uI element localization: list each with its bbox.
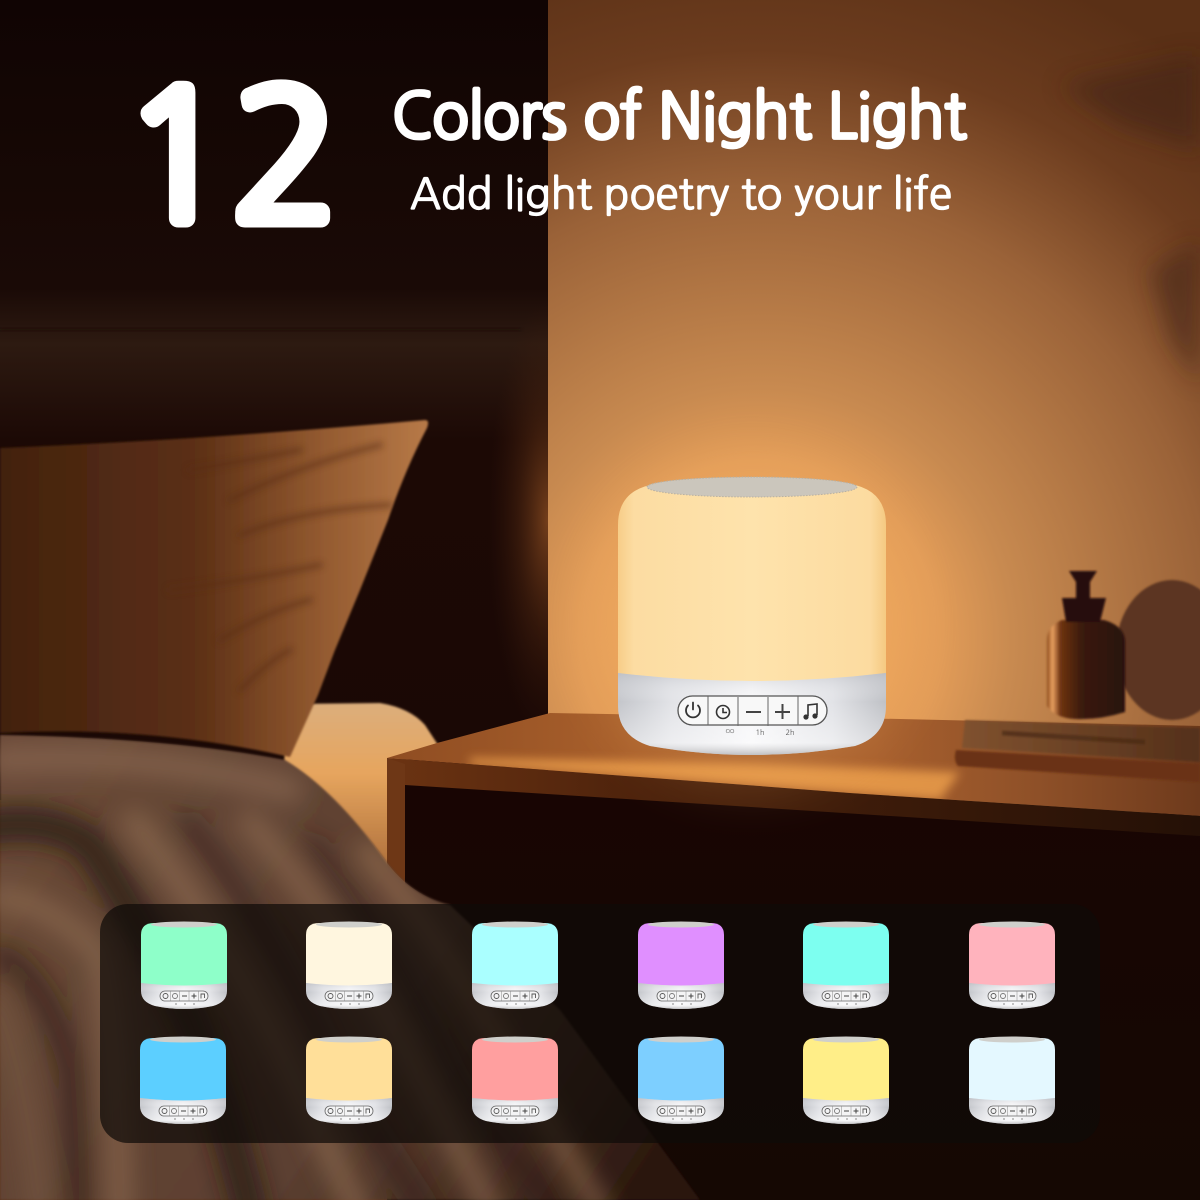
timer labels: 1h — [755, 729, 765, 737]
lamp swatch: light blue — [638, 1036, 724, 1124]
lamp swatch: cream — [306, 922, 392, 1009]
plant shadow on wall — [1060, 55, 1200, 385]
icon: minus — [746, 711, 761, 713]
lamp swatch: warm yellow — [306, 1036, 392, 1124]
round mirror object — [1116, 580, 1200, 720]
nightstand — [387, 713, 1200, 1200]
lamp swatch: green — [141, 922, 227, 1009]
headboard — [0, 0, 548, 800]
blanket folds — [0, 759, 600, 1200]
lamp shade — [618, 478, 886, 682]
lamp swatch: pink — [969, 922, 1055, 1009]
speaker grille — [647, 477, 857, 497]
table interior — [387, 780, 1200, 1200]
pillow wrinkles — [238, 440, 393, 686]
bed sheet — [280, 703, 440, 880]
title number: 12 — [122, 68, 340, 246]
panel background — [100, 904, 1100, 1143]
icon: music note — [804, 704, 817, 719]
lamp swatch: sky blue — [140, 1036, 226, 1124]
subheading: Add light poetry to your life — [410, 174, 952, 216]
lamp swatch: yellow — [803, 1036, 889, 1124]
control buttons — [678, 696, 827, 726]
bottle — [1047, 571, 1125, 719]
table top — [387, 713, 1200, 816]
icon: power — [686, 702, 700, 717]
timer labels: 2h — [785, 729, 795, 737]
panel: color swatches — [100, 904, 1100, 1143]
lamp swatch: purple — [638, 922, 724, 1009]
icon: plus — [775, 704, 790, 719]
lamp swatch: pale cyan — [472, 922, 558, 1009]
books — [955, 720, 1200, 782]
lamp base — [618, 673, 886, 755]
headline: Colors of Night Light — [392, 85, 966, 147]
icon: clock — [716, 706, 730, 718]
table top light reflection — [470, 758, 960, 800]
pillow — [0, 420, 428, 757]
blanket — [0, 735, 700, 1200]
table front edge — [387, 758, 1200, 836]
lamp swatch: ice white — [969, 1036, 1055, 1124]
table leg — [387, 758, 405, 890]
main lamp — [618, 477, 886, 755]
lamp glow halo — [592, 460, 912, 780]
timer labels — [726, 726, 795, 737]
lamp swatch: aqua — [803, 922, 889, 1009]
timer labels: ∞ — [726, 726, 735, 737]
lamp swatch: coral — [472, 1036, 558, 1124]
